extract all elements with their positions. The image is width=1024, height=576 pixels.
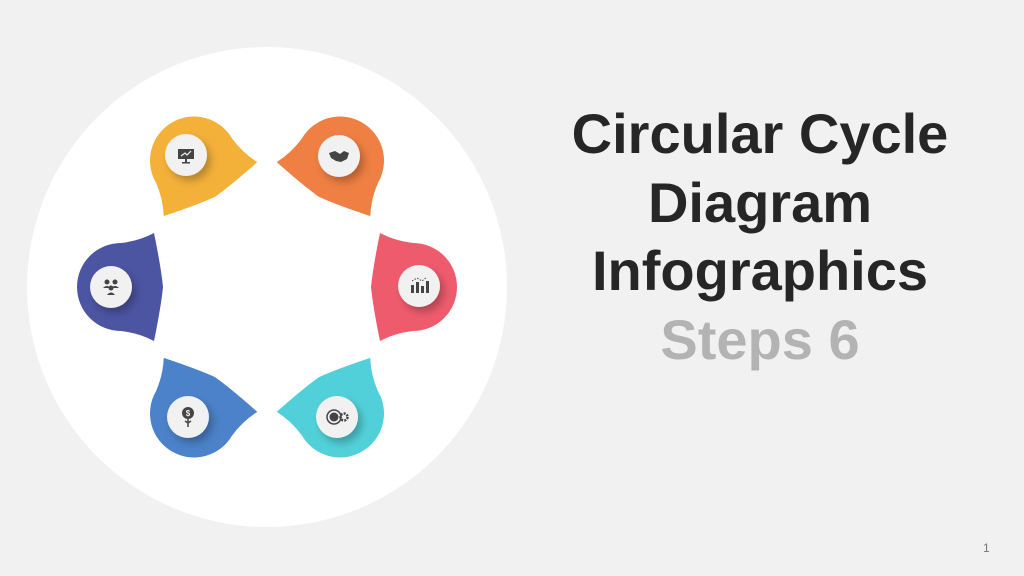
title: Diagram [648, 170, 872, 234]
icon: bar chart [398, 265, 440, 307]
icon: money plant [167, 396, 209, 438]
icon: monitor chart [165, 134, 207, 176]
icon: money plant: $ [186, 409, 191, 418]
title [572, 102, 948, 370]
step blob: red [371, 233, 457, 341]
step blob: teal [272, 350, 409, 479]
icon: team [90, 266, 132, 308]
title: Circular Cycle [572, 102, 948, 165]
step blob: blue [125, 350, 262, 479]
icon: dollar gear [316, 396, 358, 438]
step blob: yellow [125, 95, 262, 224]
white background circle [27, 47, 507, 527]
title: Steps 6 [660, 308, 860, 370]
step blob: orange [272, 95, 409, 224]
page number: 1 [983, 541, 990, 555]
step blob: purple [77, 233, 163, 341]
title: Infographics [592, 239, 928, 302]
icon: handshake [318, 135, 360, 177]
